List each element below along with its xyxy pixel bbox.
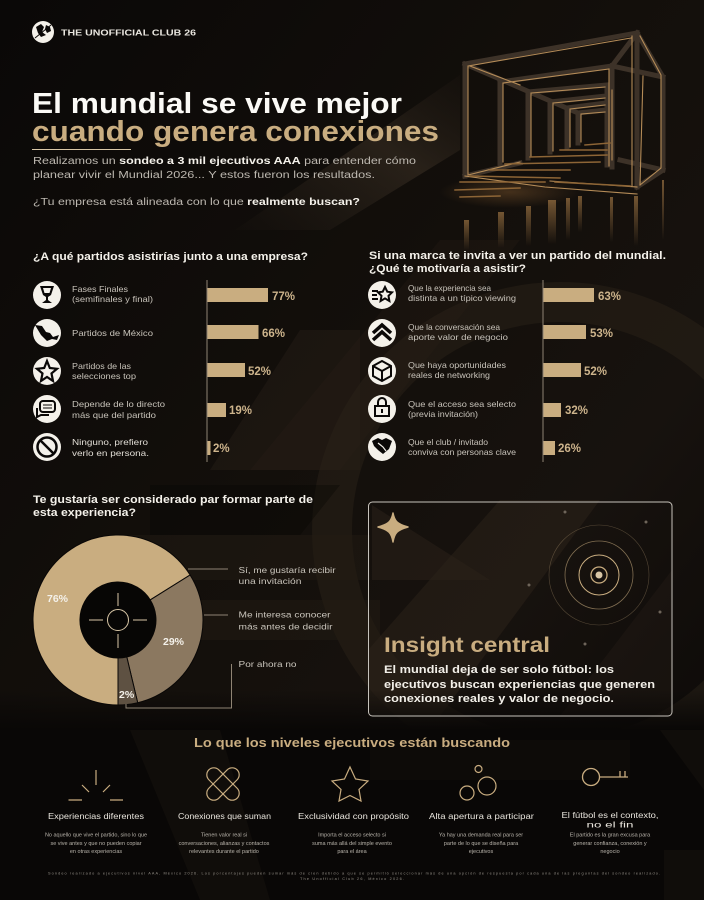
description: conversaciones, alianzas y contactos bbox=[179, 841, 270, 847]
values: 77% bbox=[272, 291, 295, 303]
donut bbox=[33, 535, 203, 705]
section heading: Lo que los niveles ejecutivos están buscando bbox=[194, 736, 510, 750]
label: ninguno bbox=[72, 437, 149, 458]
column: alta apertura a participar bbox=[429, 766, 534, 855]
label: acceso: (previa invitación) bbox=[408, 409, 478, 419]
column: el fútbol es el contexto bbox=[562, 768, 658, 855]
icon: star with speed lines bbox=[368, 281, 396, 309]
label: networking bbox=[408, 360, 506, 380]
values bbox=[558, 291, 621, 455]
values: 53% bbox=[590, 328, 613, 340]
donut values: 29% bbox=[163, 636, 185, 648]
description: Ya hay una demanda real para ser bbox=[439, 832, 523, 838]
heading: ¿Qué te motivaría a asistir? bbox=[369, 263, 526, 275]
label: experiencia bbox=[408, 283, 516, 303]
legend labels: Sí, me gustaría recibir bbox=[238, 565, 336, 575]
description: para el área bbox=[337, 849, 368, 855]
legend labels: una invitación bbox=[238, 576, 302, 586]
legend labels: Me interesa conocer bbox=[238, 610, 331, 620]
description: No aquello que vive el partido, sino lo que bbox=[45, 832, 147, 838]
donut values bbox=[47, 593, 185, 701]
icon: double chevron bbox=[368, 319, 396, 347]
panel: match attendance chart bbox=[33, 251, 308, 462]
footnote: Sondeo realizado a ejecutivos nivel AAA, México 2026. Los porcentajes pueden sumar más de cien debido a que se permitió seleccionar más de una opción de respuesta por cada una de las preguntas del sondeo realizado. bbox=[48, 872, 660, 876]
values: 26% bbox=[558, 443, 581, 455]
description bbox=[45, 832, 147, 855]
axis bbox=[206, 280, 208, 462]
insight text: ejecutivos buscan experiencias que generen bbox=[384, 679, 655, 691]
footnote bbox=[48, 872, 660, 881]
description bbox=[570, 832, 651, 855]
icon: star bbox=[33, 357, 61, 385]
label: depende: Depende de lo directo bbox=[72, 399, 165, 409]
label: conversación: Que la conversación sea bbox=[408, 322, 500, 332]
name: Experiencias diferentes bbox=[48, 811, 144, 821]
insight text: conexiones reales y valor de negocio. bbox=[384, 693, 614, 705]
values: 32% bbox=[565, 405, 588, 417]
hero illustration: illuminated cube tunnel bbox=[440, 33, 664, 250]
floor steps bbox=[455, 143, 630, 197]
icon: mexico map bbox=[33, 319, 61, 347]
values: 52% bbox=[584, 366, 607, 378]
insight text bbox=[384, 664, 655, 705]
name: no el fin bbox=[586, 820, 634, 830]
brand name: THE UNOFFICIAL CLUB 26 bbox=[61, 28, 196, 38]
description: Importa el acceso selecto si bbox=[318, 832, 386, 838]
heading: esta experiencia? bbox=[33, 507, 136, 519]
description: suma más allá del simple evento bbox=[312, 841, 392, 847]
name: El fútbol es el contexto, bbox=[562, 810, 658, 820]
description: El partido es la gran excusa para bbox=[570, 832, 651, 838]
logo bbox=[32, 21, 196, 43]
column: experiencias diferentes bbox=[45, 770, 147, 855]
label: depende: más que del partido bbox=[72, 410, 156, 420]
label: ninguno: verlo en persona. bbox=[72, 448, 149, 458]
icon: padlock bbox=[368, 395, 396, 423]
label: partidos de méxico: Partidos de México bbox=[72, 328, 153, 338]
label: selecciones: Partidos de las bbox=[72, 361, 131, 371]
panel: insight central bbox=[368, 502, 672, 716]
label: acceso: Que el acceso sea selecto bbox=[408, 399, 516, 409]
panel: motivation chart bbox=[368, 250, 666, 462]
icon: crossed capsules bbox=[204, 765, 242, 803]
name: Conexiones que suman bbox=[178, 811, 271, 821]
icon: burst bbox=[68, 770, 123, 800]
values: 63% bbox=[598, 291, 621, 303]
column: exclusividad con propósito bbox=[298, 767, 409, 855]
title underline bbox=[32, 149, 131, 150]
gold edges bbox=[465, 36, 661, 194]
intro text: Realizamos un sondeo a 3 mil ejecutivos AAA para entender cómo bbox=[33, 156, 417, 167]
label: invitado: conviva con personas clave bbox=[408, 447, 516, 457]
dark structure bbox=[465, 33, 663, 187]
description bbox=[179, 832, 270, 855]
label: depende bbox=[72, 399, 165, 420]
description bbox=[312, 832, 392, 855]
icon: key bbox=[582, 768, 628, 786]
heading: Si una marca te invita a ver un partido del mundial. bbox=[369, 250, 666, 262]
label: conversación bbox=[408, 322, 508, 342]
icon: chat bbox=[33, 395, 61, 423]
label: networking: reales de networking bbox=[408, 370, 490, 380]
description: parte de lo que se diseña para bbox=[444, 841, 519, 847]
label: conversación: aporte valor de negocio bbox=[408, 332, 508, 342]
reflections bbox=[464, 180, 664, 250]
icon: prohibited bbox=[33, 433, 61, 461]
title: cuando genera conexiones bbox=[32, 116, 439, 148]
donut values: 2% bbox=[119, 689, 135, 701]
description: en otras experiencias bbox=[70, 849, 122, 855]
legend labels: más antes de decidir bbox=[238, 622, 333, 632]
heading: ¿A qué partidos asistirías junto a una empresa? bbox=[33, 251, 308, 263]
footnote: The Unofficial Club 26, México 2026. bbox=[300, 877, 404, 881]
label: acceso bbox=[408, 399, 516, 419]
icon: club crest bbox=[32, 21, 54, 43]
description: generar confianza, conexión y bbox=[573, 841, 647, 847]
description: relevantes durante el partido bbox=[189, 849, 259, 855]
heading bbox=[369, 250, 666, 275]
icon: bubbles bbox=[460, 766, 496, 800]
values bbox=[213, 291, 295, 455]
description bbox=[439, 832, 523, 855]
intro text bbox=[33, 156, 417, 208]
donut centre bbox=[80, 582, 156, 658]
legend labels bbox=[238, 565, 336, 669]
axis bbox=[542, 280, 544, 462]
description: ejecutivos bbox=[469, 849, 493, 855]
label: experiencia: distinta a un típico viewing bbox=[408, 293, 516, 303]
intro text: ¿Tu empresa está alineada con lo que realmente buscan? bbox=[33, 197, 360, 208]
values: 2% bbox=[213, 443, 230, 455]
description: Tienen valor real si bbox=[201, 832, 247, 838]
label: networking: Que haya oportunidades bbox=[408, 360, 506, 370]
heading: Te gustaría ser considerado par formar parte de bbox=[33, 494, 313, 506]
floor glow bbox=[440, 176, 580, 208]
name: Exclusividad con propósito bbox=[298, 811, 409, 821]
values: 66% bbox=[262, 328, 285, 340]
legend labels: Por ahora no bbox=[238, 659, 297, 669]
name bbox=[562, 810, 658, 830]
column: conexiones que suman bbox=[178, 765, 271, 855]
icon: sparkle bbox=[378, 513, 408, 542]
label: selecciones bbox=[72, 361, 136, 381]
label: selecciones: selecciones top bbox=[72, 371, 136, 381]
icon: star outline bbox=[332, 767, 368, 801]
title bbox=[32, 88, 439, 148]
heading bbox=[33, 494, 313, 519]
intro text: planear vivir el Mundial 2026... Y estos fueron los resultados. bbox=[33, 170, 375, 181]
values: 19% bbox=[229, 405, 252, 417]
icon: handshake bbox=[368, 433, 396, 461]
description: negocio bbox=[600, 849, 620, 855]
label: invitado bbox=[408, 437, 516, 457]
label: fases finales bbox=[72, 284, 153, 304]
icon: trophy bbox=[33, 281, 61, 309]
panel: donut chart bbox=[33, 494, 336, 708]
leader lines bbox=[126, 569, 232, 708]
label: fases finales: (semifinales y final) bbox=[72, 294, 153, 304]
donut values: 76% bbox=[47, 593, 69, 605]
label: invitado: Que el club / invitado bbox=[408, 437, 488, 447]
insight heading: Insight central bbox=[384, 634, 550, 657]
label: experiencia: Que la experiencia sea bbox=[408, 283, 491, 293]
description: se vive antes y que no pueden copiar bbox=[50, 841, 142, 847]
icon: cube bbox=[368, 357, 396, 385]
name: Alta apertura a participar bbox=[429, 811, 534, 821]
bar chart bbox=[208, 288, 268, 455]
values: 52% bbox=[248, 366, 271, 378]
label: ninguno: Ninguno, prefiero bbox=[72, 437, 148, 447]
icon: radar rings bbox=[528, 510, 662, 646]
frame bbox=[368, 502, 672, 716]
title: El mundial se vive mejor bbox=[32, 88, 402, 120]
bar chart bbox=[544, 288, 594, 455]
label: fases finales: Fases Finales bbox=[72, 284, 128, 294]
insight text: El mundial deja de ser solo fútbol: los bbox=[384, 664, 614, 676]
